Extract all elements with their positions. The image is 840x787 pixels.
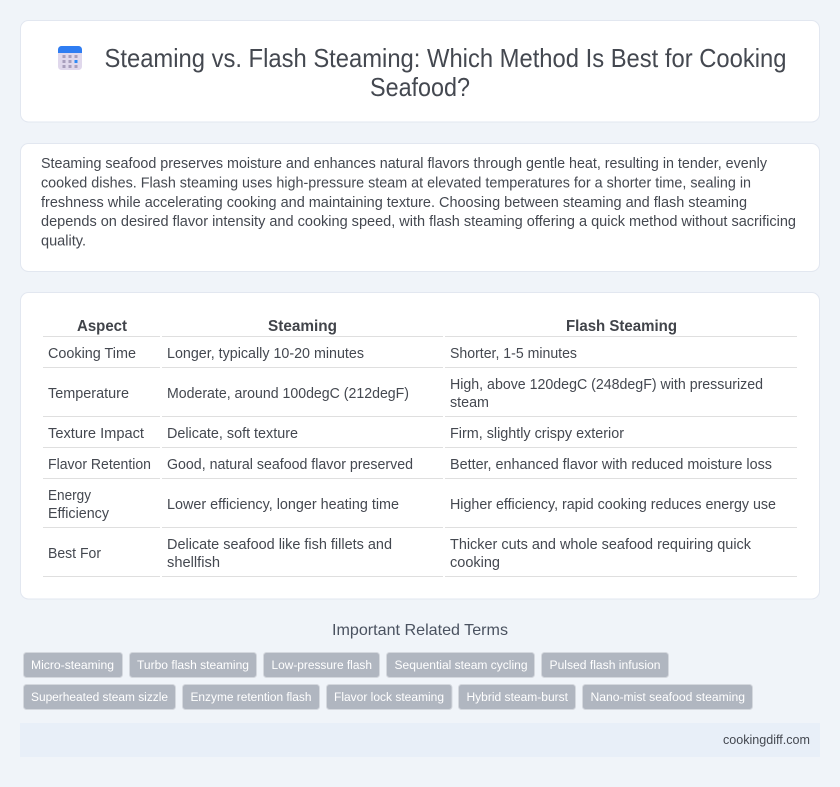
- footer: [20, 723, 820, 757]
- panel: term tags: Turbo flash steaming: [137, 658, 249, 672]
- panel: term tags: Micro-steaming: [31, 658, 114, 672]
- row: cooking time: Longer, typically 10-20 minutes: [167, 346, 364, 362]
- row: energy efficiency: Energy: [48, 488, 92, 504]
- table header: [77, 318, 677, 335]
- row: best for: cooking: [450, 555, 500, 571]
- row: energy efficiency: Lower efficiency, longer heating time: [167, 497, 399, 513]
- panel: term tags: Hybrid steam-burst: [466, 690, 569, 704]
- panel: term tags: Low-pressure flash: [272, 658, 372, 672]
- row: best for: Best For: [48, 546, 101, 562]
- panel: title card: [20, 20, 820, 122]
- title: Steaming vs. Flash Steaming: Which Method Is Best for Cooking: [104, 45, 786, 73]
- row: best for: shellfish: [167, 555, 220, 571]
- row: energy efficiency: [48, 488, 776, 522]
- panel: term tags: Pulsed flash infusion: [550, 658, 660, 672]
- panel: term tags: Enzyme retention flash: [190, 690, 312, 704]
- intro text: Steaming seafood preserves moisture and enhances natural flavors through gentle heat, resulting in tender, evenly: [41, 156, 768, 172]
- table header: Steaming: [268, 318, 337, 335]
- title: Seafood?: [370, 74, 470, 102]
- row: temperature: Moderate, around 100degC (212degF): [167, 386, 409, 402]
- table header: Aspect: [77, 318, 127, 335]
- row: texture impact: Texture Impact: [48, 426, 144, 442]
- row: texture impact: Delicate, soft texture: [167, 426, 298, 442]
- intro text: quality.: [41, 234, 86, 250]
- row: temperature: Temperature: [48, 386, 129, 402]
- panel: term tags: Flavor lock steaming: [334, 690, 444, 704]
- icon: calendar: [58, 46, 82, 70]
- row: best for: Delicate seafood like fish fillets and: [167, 537, 392, 553]
- intro text: freshness while accelerating cooking and maintaining texture. Choosing between steaming and flash steaming: [41, 195, 747, 211]
- panel: term tags: [24, 652, 752, 710]
- intro text: [41, 156, 796, 250]
- panel: term tags: Nano-mist seafood steaming: [590, 690, 745, 704]
- footer: cookingdiff.com: [723, 732, 810, 747]
- row: cooking time: [48, 346, 577, 362]
- intro text: depends on desired flavor intensity and cooking speed, with flash steaming offering a quick method without sacrificing: [41, 214, 796, 230]
- row: texture impact: Firm, slightly crispy exterior: [450, 426, 624, 442]
- row: flavor retention: Flavor Retention: [48, 457, 151, 473]
- panel: comparison table: [20, 292, 820, 599]
- intro text: cooked dishes. Flash steaming uses high-pressure steam at elevated temperatures for a shorter time, sealing in: [41, 175, 751, 191]
- row: cooking time: Cooking Time: [48, 346, 136, 362]
- heading: related terms: Important Related Terms: [332, 622, 508, 639]
- row: best for: [48, 537, 752, 571]
- row: flavor retention: Better, enhanced flavor with reduced moisture loss: [450, 457, 772, 473]
- panel: term tags: Sequential steam cycling: [394, 658, 528, 672]
- row: temperature: steam: [450, 395, 489, 411]
- row: flavor retention: [48, 457, 772, 473]
- row: flavor retention: Good, natural seafood flavor preserved: [167, 457, 413, 473]
- row: cooking time: Shorter, 1-5 minutes: [450, 346, 577, 362]
- row: texture impact: [48, 426, 624, 442]
- table rules: [43, 336, 797, 577]
- row: temperature: [48, 377, 763, 411]
- row: temperature: High, above 120degC (248degF) with pressurized: [450, 377, 763, 393]
- row: energy efficiency: Higher efficiency, rapid cooking reduces energy use: [450, 497, 776, 513]
- title: [104, 45, 786, 102]
- row: energy efficiency: Efficiency: [48, 506, 110, 522]
- table header: Flash Steaming: [566, 318, 677, 335]
- row: best for: Thicker cuts and whole seafood requiring quick: [450, 537, 752, 553]
- panel: term tags: Superheated steam sizzle: [31, 690, 168, 704]
- panel: introduction: [20, 144, 820, 272]
